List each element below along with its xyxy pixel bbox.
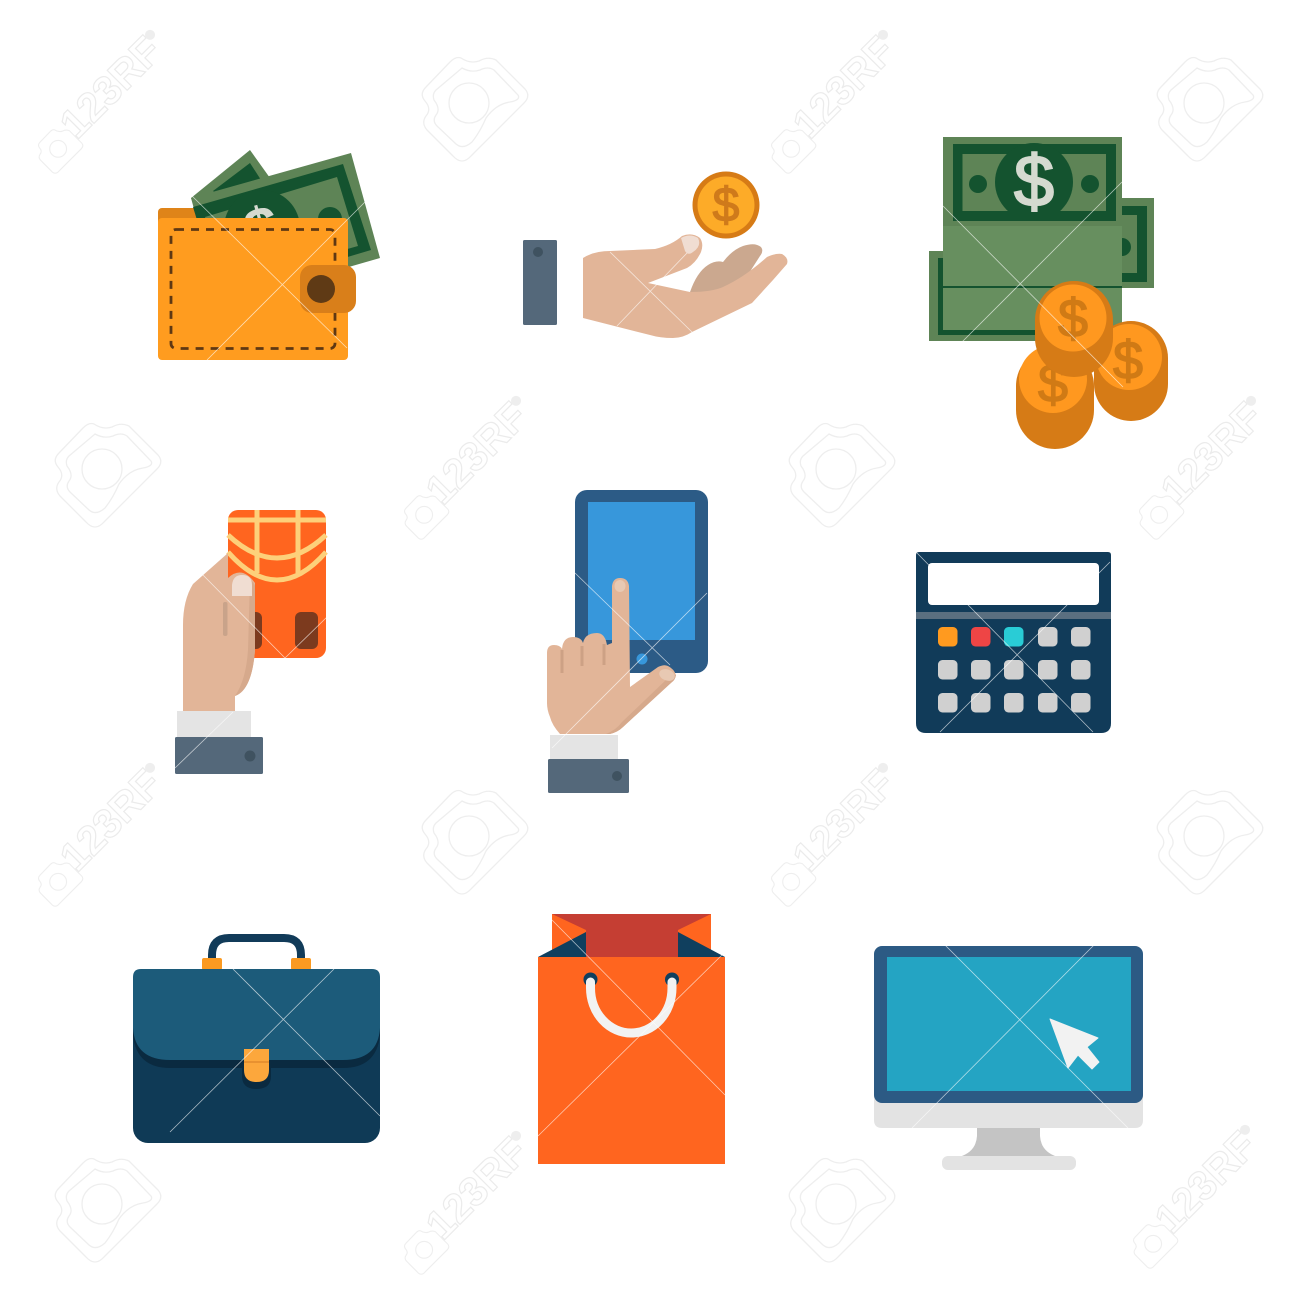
hand	[183, 553, 255, 711]
icon: desktop monitor with cursor	[874, 946, 1143, 1170]
watermark: 123RF logo	[381, 1122, 555, 1296]
watermark: egg logo	[1157, 790, 1263, 894]
card	[228, 510, 326, 658]
stand base	[942, 1156, 1076, 1170]
wallet back flap	[158, 208, 348, 248]
shirt cuff	[550, 735, 618, 759]
coin stack left	[1016, 345, 1094, 449]
left inner triangle	[538, 932, 586, 957]
thumb shade	[235, 580, 255, 696]
sleeve	[548, 759, 629, 793]
thumb shade	[606, 675, 676, 734]
calculator body	[916, 552, 1111, 733]
watermark: 123RF logo: 123RF	[1152, 393, 1271, 513]
coin stack left: $	[1038, 354, 1068, 414]
back panel	[552, 914, 711, 957]
watermark: 123RF logo	[748, 21, 922, 195]
icon: hand catching coin	[523, 172, 787, 338]
icon: wallet with banknotes	[158, 150, 380, 360]
watermark: 123RF logo	[15, 21, 189, 195]
watermark: 123RF logo: 123RF	[784, 760, 903, 880]
handle lugs	[202, 958, 311, 970]
flap shadow	[133, 1020, 380, 1068]
divider strip	[916, 612, 1111, 619]
watermark: egg logo	[422, 58, 528, 161]
index fingernail	[614, 580, 626, 592]
watermark: 123RF logo	[748, 754, 922, 928]
thumbnail	[681, 236, 699, 254]
banknote stack	[943, 137, 1122, 341]
tablet body	[575, 490, 708, 673]
case body	[133, 969, 380, 1143]
front banknote: $	[237, 192, 287, 265]
flap	[133, 969, 380, 1060]
watermark diagonals over icons	[170, 182, 1128, 1136]
watermark: 123RF logo	[1110, 1116, 1284, 1290]
thumbnail	[658, 667, 676, 683]
sleeve	[175, 737, 263, 774]
watermark: 123RF logo: 123RF	[417, 393, 536, 513]
watermark: egg logo	[55, 1158, 161, 1262]
icon: hand holding credit card	[175, 510, 326, 774]
icon: banknotes and coins	[929, 137, 1168, 449]
card slots	[240, 612, 318, 649]
icon: shopping bag	[538, 914, 725, 1164]
clasp button	[307, 275, 335, 303]
hand	[583, 234, 787, 338]
watermark: egg logo	[1157, 58, 1263, 161]
monitor chin	[874, 1095, 1143, 1128]
coin stack top: $	[1058, 289, 1088, 349]
clasp line	[244, 1061, 269, 1063]
cursor arrow	[1050, 1019, 1099, 1069]
watermark: 123RF logo: 123RF	[417, 1128, 536, 1248]
right inner triangle	[678, 932, 725, 957]
icon: briefcase	[133, 938, 380, 1143]
monitor stand neck	[959, 1126, 1058, 1157]
watermark: 123RF logo: 123RF	[784, 27, 903, 147]
watermark: egg logo	[789, 424, 895, 527]
coin stack top	[1035, 281, 1113, 377]
back banknote	[191, 150, 275, 240]
front banknote	[191, 153, 380, 304]
icon: hand using tablet	[547, 490, 708, 793]
watermark: 123RF logo	[15, 754, 189, 928]
coin	[692, 172, 760, 238]
clasp shadow	[242, 1060, 271, 1089]
finger crease	[223, 602, 228, 636]
keypad	[938, 627, 1090, 712]
coin stack right: $	[1113, 331, 1143, 391]
clasp	[244, 1049, 269, 1082]
right banknote	[1100, 198, 1154, 288]
display	[928, 563, 1099, 605]
sleeve button	[533, 247, 543, 257]
thumbnail	[232, 575, 252, 596]
bag front	[538, 957, 725, 1164]
handle	[212, 938, 301, 960]
sleeve	[523, 240, 557, 325]
top banknote artwork: $	[1014, 142, 1054, 222]
icon: calculator	[916, 552, 1111, 733]
watermark: egg logo	[422, 790, 528, 894]
handle holes	[584, 972, 679, 986]
top banknote artwork	[953, 142, 1116, 222]
home button	[636, 654, 648, 664]
tablet screen	[588, 502, 695, 640]
inner fold	[552, 914, 711, 957]
monitor frame	[874, 946, 1143, 1103]
watermark: 123RF logo: 123RF	[51, 760, 170, 880]
coin stack right	[1094, 321, 1168, 421]
shirt cuff	[177, 711, 251, 738]
watermark: 123RF logo	[381, 387, 555, 561]
coin: $	[713, 179, 739, 232]
wallet body	[158, 218, 348, 360]
sleeve button	[244, 750, 256, 762]
back fingers	[690, 244, 762, 295]
watermark: egg logo	[789, 1158, 895, 1262]
left banknote	[929, 251, 969, 341]
watermark: 123RF logo: 123RF	[51, 27, 170, 147]
sleeve button	[612, 771, 622, 781]
pointing hand	[547, 578, 676, 734]
watermark: egg logo	[55, 424, 161, 527]
chip pattern	[228, 510, 326, 580]
finger creases	[562, 644, 604, 673]
handle	[590, 982, 672, 1033]
screen	[887, 957, 1131, 1091]
watermark: 123RF logo: 123RF	[1146, 1122, 1265, 1242]
watermark: 123RF logo	[1116, 387, 1290, 561]
stitching	[171, 230, 335, 348]
wallet clasp	[300, 265, 356, 313]
